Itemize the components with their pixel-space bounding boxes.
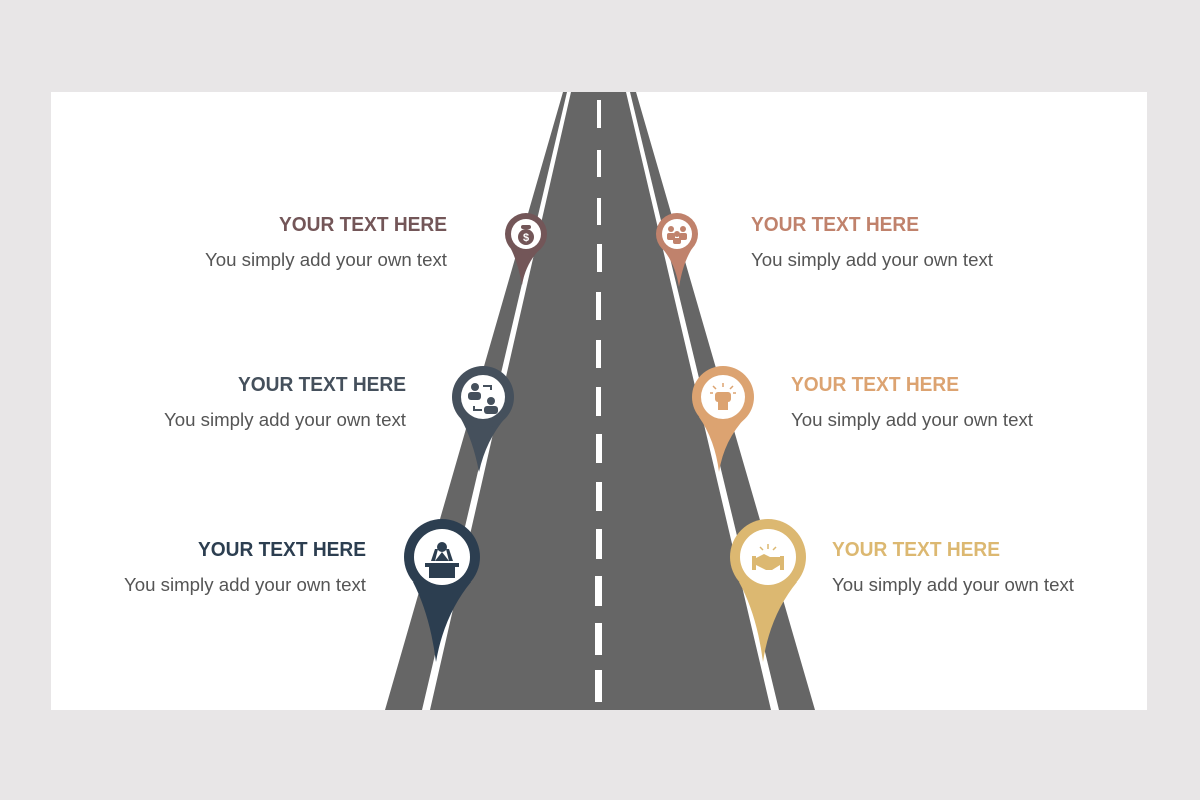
text left 3: YOUR TEXT HERE xyxy=(198,539,366,561)
pin 2 right xyxy=(692,366,754,472)
text left 3 xyxy=(124,539,366,595)
road xyxy=(385,92,815,710)
text left 2: YOUR TEXT HERE xyxy=(238,374,406,396)
text left 3: You simply add your own text xyxy=(124,575,366,595)
text right 2 xyxy=(791,374,1033,430)
text right 3: You simply add your own text xyxy=(832,575,1074,595)
pin 1 right xyxy=(656,213,698,287)
text left 1: You simply add your own text xyxy=(205,250,447,270)
text right 3: YOUR TEXT HERE xyxy=(832,539,1000,561)
text right 3 xyxy=(832,539,1074,595)
icon: idea fist xyxy=(710,383,736,410)
text right 1: YOUR TEXT HERE xyxy=(751,214,919,236)
text left 1 xyxy=(205,214,447,270)
text right 2: YOUR TEXT HERE xyxy=(791,374,959,396)
icon: exchange people xyxy=(468,383,498,414)
text right 1: You simply add your own text xyxy=(751,250,993,270)
pin 3 right xyxy=(730,519,806,662)
pin 1 left xyxy=(505,213,547,285)
pin 3 left xyxy=(404,519,480,662)
text right 2: You simply add your own text xyxy=(791,410,1033,430)
icon: handshake xyxy=(752,544,784,570)
pin 2 left xyxy=(452,366,514,472)
text left 1: YOUR TEXT HERE xyxy=(279,214,447,236)
icon: money bag: $ xyxy=(523,232,529,244)
text left 2 xyxy=(164,374,406,430)
text left 2: You simply add your own text xyxy=(164,410,406,430)
slide panel xyxy=(51,92,1147,710)
icon: team xyxy=(667,226,687,244)
text right 1 xyxy=(751,214,993,270)
icon: speaker podium xyxy=(425,542,459,578)
